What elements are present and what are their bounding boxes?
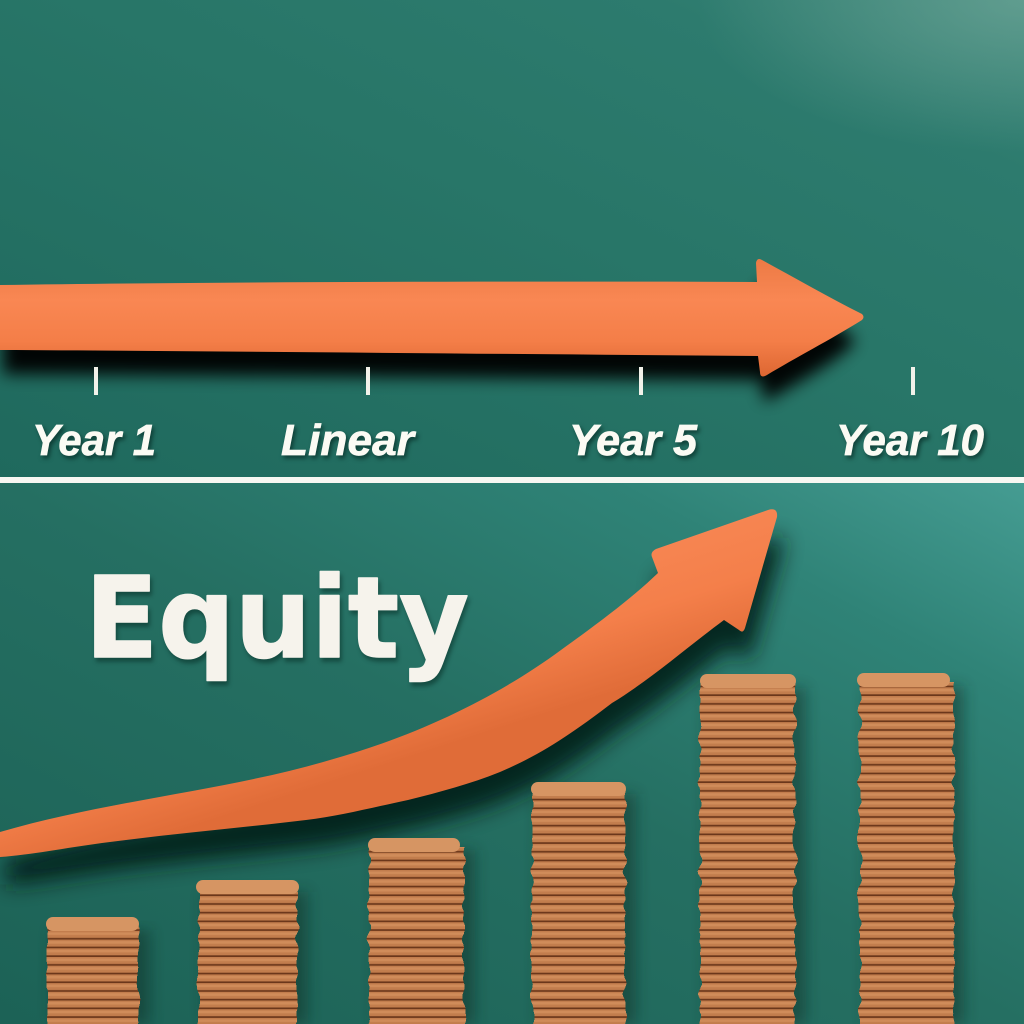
arrow: curved equity growth [0, 509, 783, 885]
label: Year 1: Year 1 [32, 416, 156, 465]
coin stack 2 [196, 880, 308, 1024]
label: Year 10: Year 10 [836, 416, 984, 465]
tick: year 10 [911, 367, 915, 395]
divider [0, 477, 1024, 483]
panel: equity growth [0, 483, 1024, 1024]
tick: linear [366, 367, 370, 395]
coin stack 5 [700, 674, 806, 1024]
coin stack 3 [368, 838, 475, 1024]
heading: Equity: Equity [85, 554, 469, 684]
arrow: flat linear growth [0, 259, 864, 400]
label: Year 5: Year 5 [569, 416, 698, 465]
tick: year 5 [639, 367, 643, 395]
coin stack 4 [531, 782, 636, 1024]
coin stack 6 [857, 673, 964, 1024]
panel: linear growth [0, 0, 1024, 478]
tick: year 1 [94, 367, 98, 395]
label: Linear: Linear [281, 416, 417, 465]
coin stack 1 [46, 917, 150, 1024]
